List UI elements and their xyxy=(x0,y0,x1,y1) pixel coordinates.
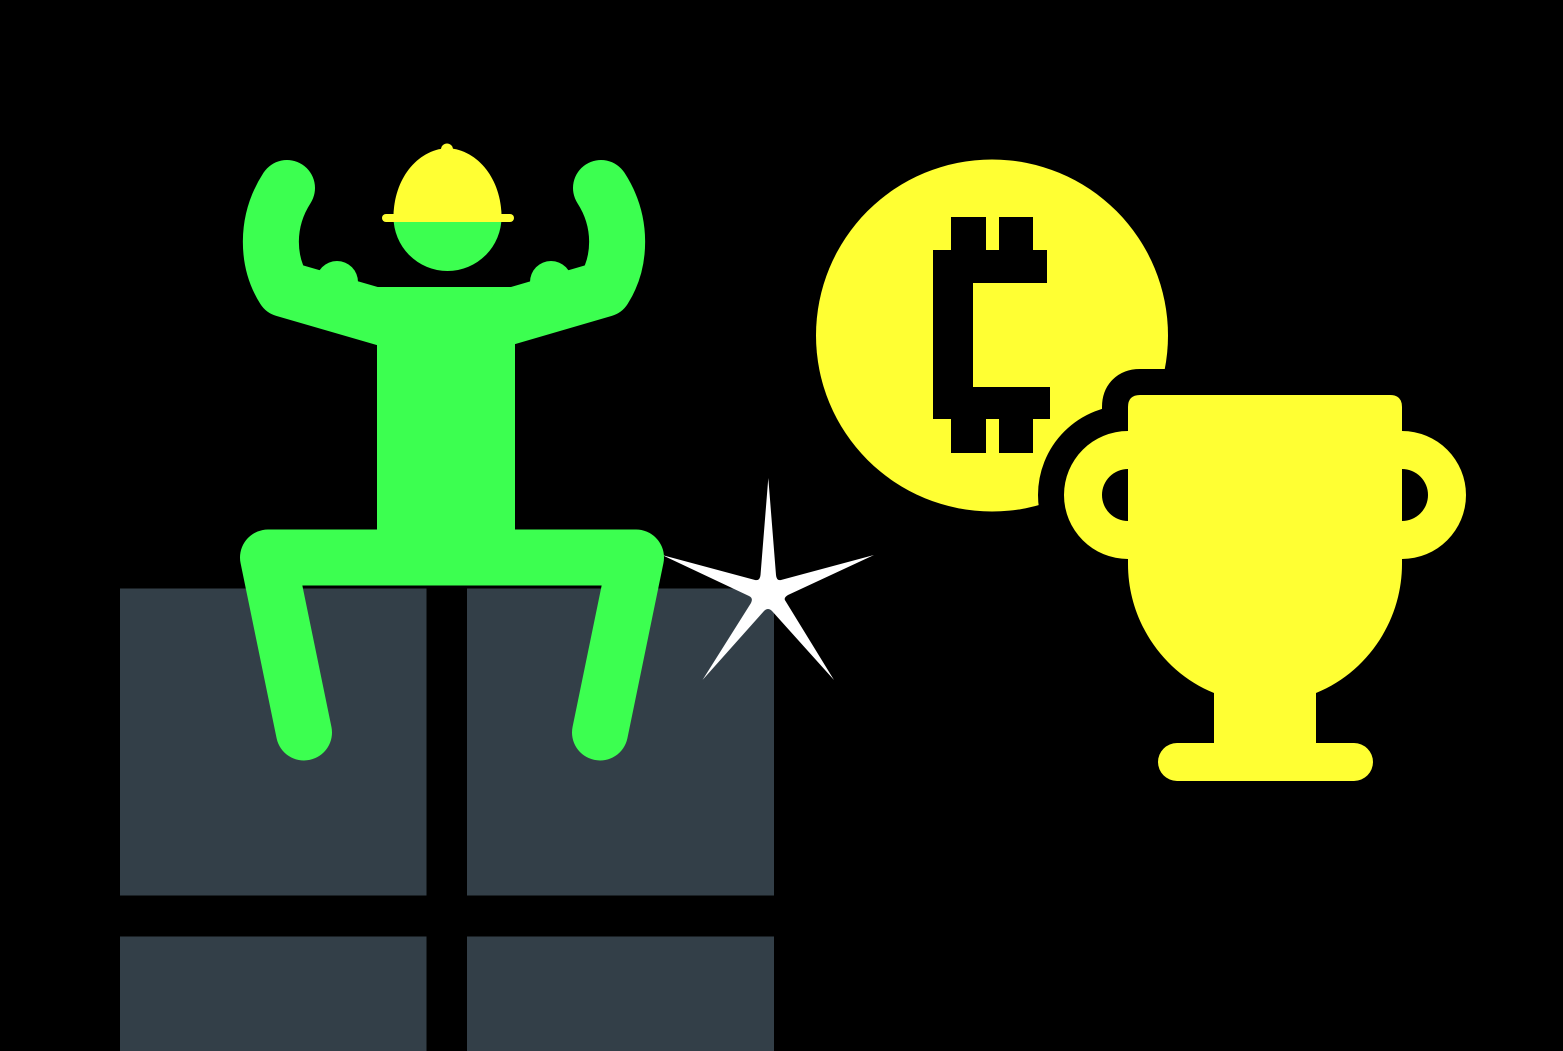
trophy handles xyxy=(1064,431,1140,559)
left arm xyxy=(271,188,384,318)
icon: white sparkle star xyxy=(662,478,874,680)
stone blocks wall xyxy=(120,588,774,1051)
trophy black outline xyxy=(1064,395,1402,600)
right arm xyxy=(508,188,617,317)
torso xyxy=(377,287,515,542)
thighs and legs xyxy=(268,558,636,732)
icon: bitcoin coin xyxy=(816,160,1168,512)
trophy cup and base xyxy=(1128,395,1402,781)
head xyxy=(394,163,502,271)
icon: trophy xyxy=(1064,395,1466,781)
left biceps xyxy=(316,261,358,303)
green miner figure xyxy=(268,163,636,732)
right biceps xyxy=(530,261,572,303)
icon: yellow hard hat xyxy=(382,144,514,222)
